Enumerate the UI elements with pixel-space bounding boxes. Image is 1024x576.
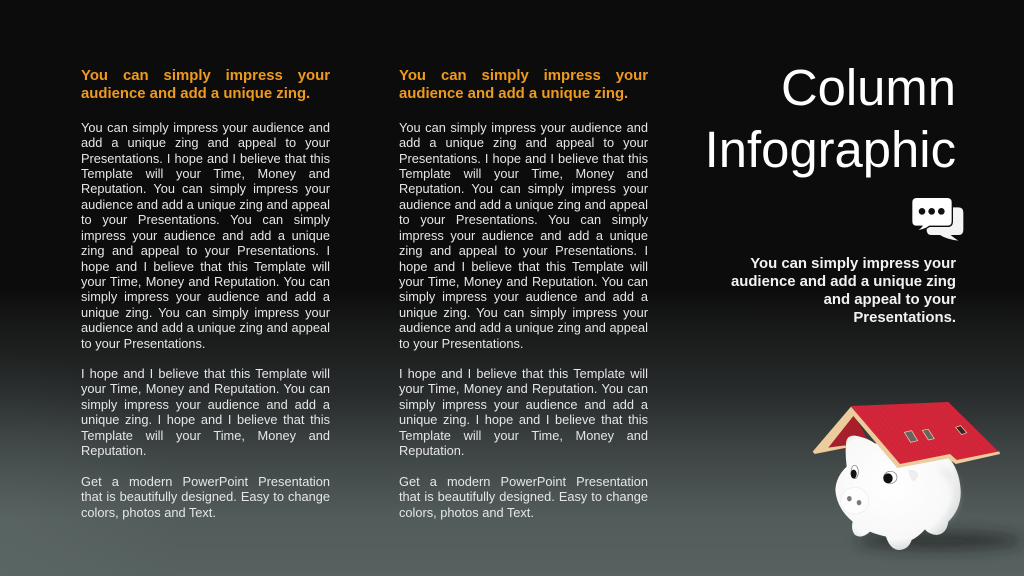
text block: column one paragraph one: simply impress your audience and add a [81, 289, 330, 304]
text block: column one paragraph one: You can simply impress your audience and [81, 120, 330, 135]
text block: column one paragraph one: audience and add a unique zing and appeal [81, 320, 330, 335]
text block: summary: You can simply impress your [750, 256, 956, 272]
text block: column two paragraph one: hope and I believe that this Template will [399, 259, 648, 274]
text block: column one paragraph one: unique zing. You can simply impress your [81, 305, 330, 320]
text block: column one paragraph two: Reputation. [81, 443, 146, 458]
text block: column one paragraph three [81, 474, 330, 520]
text block: column two paragraph two: unique zing. I hope and I believe that this [399, 412, 648, 427]
text block: column one paragraph one: zing and appeal to your Presentations. I [81, 243, 330, 258]
snout [841, 487, 869, 514]
icon: piggy bank with red roof [812, 402, 1024, 557]
text block: column two paragraph one: simply impress your audience and add a [399, 289, 648, 304]
text block: summary: and appeal to your [824, 292, 956, 308]
text block: column two paragraph one: unique zing. You can simply impress your [399, 305, 648, 320]
title: Infographic [705, 121, 956, 178]
text block: summary: audience and add a unique zing [731, 274, 956, 290]
text block: column two paragraph two: Reputation. [399, 443, 464, 458]
text block: summary [731, 256, 956, 326]
text block: column one paragraph one: audience and add a unique zing and appeal [81, 197, 330, 212]
panel: column two [399, 68, 648, 520]
text block: column two paragraph one: impress your audience and add a unique [399, 228, 648, 243]
text block: column two paragraph one: audience and add a unique zing and appeal [399, 197, 648, 212]
roof edge trim [813, 407, 1000, 468]
text block: column one paragraph three: that is beautifully designed. Easy to change [81, 489, 330, 504]
ear [908, 469, 918, 482]
text block: column two paragraph two: simply impress your audience and add a [399, 397, 648, 412]
text block: column one paragraph two: simply impress your audience and add a [81, 397, 330, 412]
text block: column one paragraph one: hope and I believe that this Template will [81, 259, 330, 274]
text block: column one paragraph one: to your Presentations. You can simply [81, 212, 330, 227]
text block: column two paragraph three [399, 474, 648, 520]
text block: summary: Presentations. [853, 310, 956, 326]
title [705, 59, 956, 178]
text block: column two paragraph two: Template will your Time, Money and [399, 428, 648, 443]
heading: column one [81, 68, 330, 102]
text block: column one paragraph one: your Time, Money and Reputation. You can [81, 274, 330, 289]
text block: column one paragraph two: your Time, Money and Reputation. You can [81, 381, 330, 396]
text block: column two paragraph one: Reputation. You can simply impress your [399, 181, 648, 196]
text block: column one paragraph one: impress your audience and add a unique [81, 228, 330, 243]
text block: column two paragraph three: Get a modern PowerPoint Presentation [399, 474, 648, 489]
roof underside [820, 408, 867, 451]
pig body [835, 436, 961, 550]
heading: column two [399, 68, 648, 102]
heading: column one: You can simply impress your [81, 68, 330, 84]
text block: column one paragraph two [81, 366, 330, 458]
text block: column one paragraph one: Template will your Time, Money and [81, 166, 330, 181]
ground shadow [857, 531, 1023, 550]
pig shading [937, 468, 958, 523]
text block: column one paragraph one: Presentations. I hope and I believe that this [81, 151, 330, 166]
roof tile lines [856, 402, 994, 467]
text block: column two paragraph one: your Time, Money and Reputation. You can [399, 274, 648, 289]
icon: speech bubbles [912, 198, 964, 241]
text block: column two paragraph one: Presentations. I hope and I believe that this [399, 151, 648, 166]
text block: column two paragraph one: to your Presentations. [399, 336, 523, 351]
eyes [851, 465, 858, 479]
text block: column two paragraph three: colors, photos and Text. [399, 505, 534, 520]
panel: column one [81, 68, 330, 520]
text block: column two paragraph one: audience and add a unique zing and appeal [399, 320, 648, 335]
roof [851, 402, 999, 467]
text block: column two paragraph two: your Time, Money and Reputation. You can [399, 381, 648, 396]
text block: column one paragraph one: Reputation. You can simply impress your [81, 181, 330, 196]
text block: column one paragraph three: Get a modern PowerPoint Presentation [81, 474, 330, 489]
text block: column one paragraph three: colors, photos and Text. [81, 505, 216, 520]
text block: column two paragraph one: Template will your Time, Money and [399, 166, 648, 181]
text block: column two paragraph one: to your Presentations. You can simply [399, 212, 648, 227]
text block: column two paragraph two: I hope and I believe that this Template will [399, 366, 648, 381]
text block: column one paragraph two: Template will your Time, Money and [81, 428, 330, 443]
text block: column two paragraph two [399, 366, 648, 458]
heading: column two: You can simply impress your [399, 68, 648, 84]
text block: column one paragraph one [81, 120, 330, 351]
heading: column one: audience and add a unique zing. [81, 86, 310, 102]
text block: column one paragraph one: to your Presentations. [81, 336, 205, 351]
heading: column two: audience and add a unique zing. [399, 86, 628, 102]
text block: column one paragraph two: unique zing. I hope and I believe that this [81, 412, 330, 427]
roof windows [904, 431, 918, 442]
text block: column two paragraph one: You can simply impress your audience and [399, 120, 648, 135]
text block: column two paragraph one [399, 120, 648, 351]
text block: column two paragraph one: add a unique zing and appeal to your [399, 135, 648, 150]
text block: column one paragraph one: add a unique zing and appeal to your [81, 135, 330, 150]
text block: column one paragraph two: I hope and I believe that this Template will [81, 366, 330, 381]
title: Column [781, 59, 956, 116]
text block: column two paragraph one: zing and appeal to your Presentations. I [399, 243, 648, 258]
text block: column two paragraph three: that is beautifully designed. Easy to change [399, 489, 648, 504]
